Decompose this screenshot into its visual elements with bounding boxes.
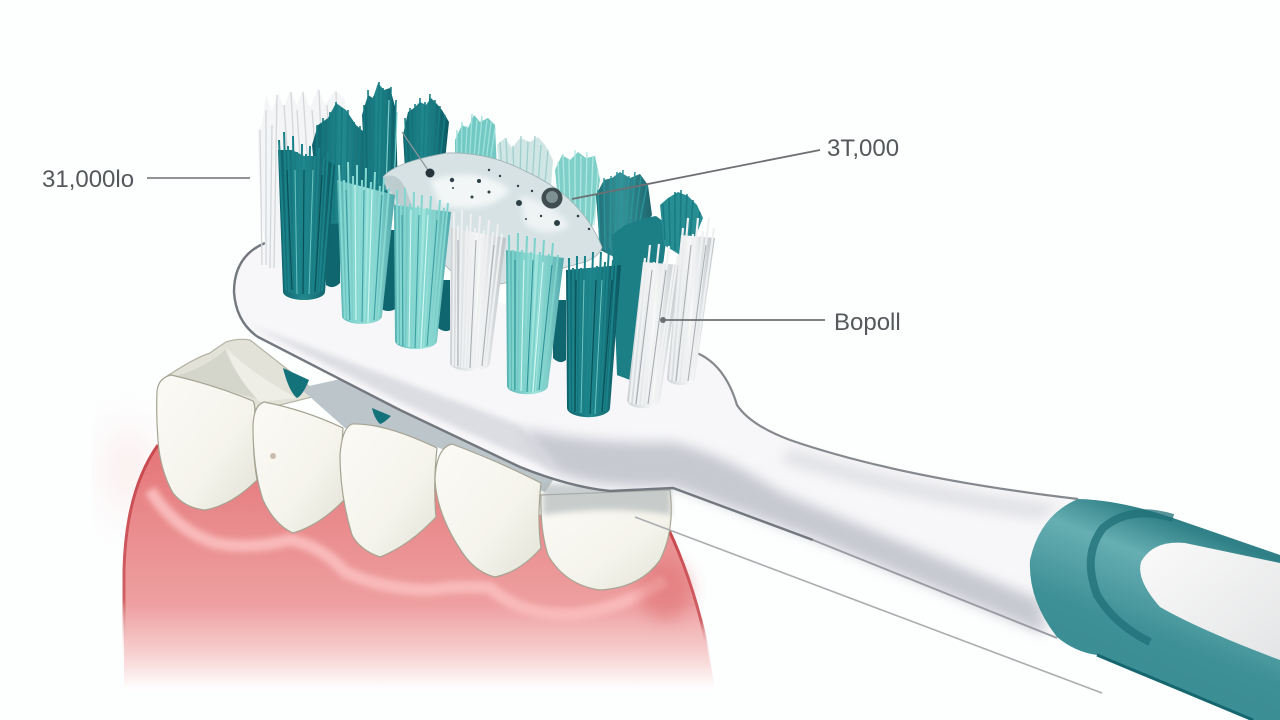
- back dark tuft b: [362, 82, 398, 200]
- back dark tuft c: [403, 94, 449, 170]
- bristle stubs beneath head: [283, 368, 391, 424]
- front dark tuft 1: [278, 132, 335, 300]
- back white tuft: [258, 88, 345, 270]
- front white tuft 4: [450, 210, 506, 371]
- label: left: 31,000lo: [42, 166, 134, 193]
- back teal tuft h: [612, 216, 668, 380]
- front bristle tufts: [278, 132, 715, 417]
- gums: [110, 425, 715, 690]
- front light tuft 5: [506, 233, 564, 394]
- shadow behind brush head: [300, 378, 560, 492]
- tooth spot: [270, 453, 276, 459]
- tooth 3: [340, 424, 437, 557]
- grip: [1030, 499, 1280, 720]
- front white tuft 8: [667, 218, 715, 385]
- toothpaste blob: [383, 132, 602, 290]
- tooth 5 shade under brush: [543, 482, 671, 515]
- back bristle bases: [326, 200, 642, 378]
- small bubble: [426, 168, 434, 178]
- back pale tuft e: [497, 136, 553, 200]
- back molar: [160, 339, 320, 410]
- back teal tuft i: [660, 190, 703, 255]
- brush head and handle: [234, 243, 1090, 638]
- back dark tuft a: [312, 102, 380, 225]
- label: top right: 3T,000: [827, 135, 899, 162]
- back light tuft f: [555, 150, 600, 240]
- front dark tuft 6: [566, 248, 621, 417]
- leader line: lower: [635, 517, 1102, 693]
- teeth: [157, 375, 671, 590]
- label: top right: [572, 135, 899, 199]
- back teal tuft g: [596, 170, 652, 260]
- white oval inset: [1140, 543, 1280, 660]
- label: right: [660, 309, 901, 336]
- front light tuft 3: [394, 188, 451, 349]
- tooth 1: [157, 375, 257, 510]
- front light tuft 2: [337, 162, 395, 324]
- label: right: Bopoll: [834, 309, 901, 336]
- tooth 4: [435, 444, 541, 577]
- front white tuft 7: [627, 244, 681, 408]
- back bristle tufts: [258, 82, 703, 380]
- back light tuft d: [455, 114, 497, 170]
- large bubble: [542, 188, 562, 208]
- tooth 2: [253, 402, 344, 533]
- tooth 5: [541, 490, 671, 590]
